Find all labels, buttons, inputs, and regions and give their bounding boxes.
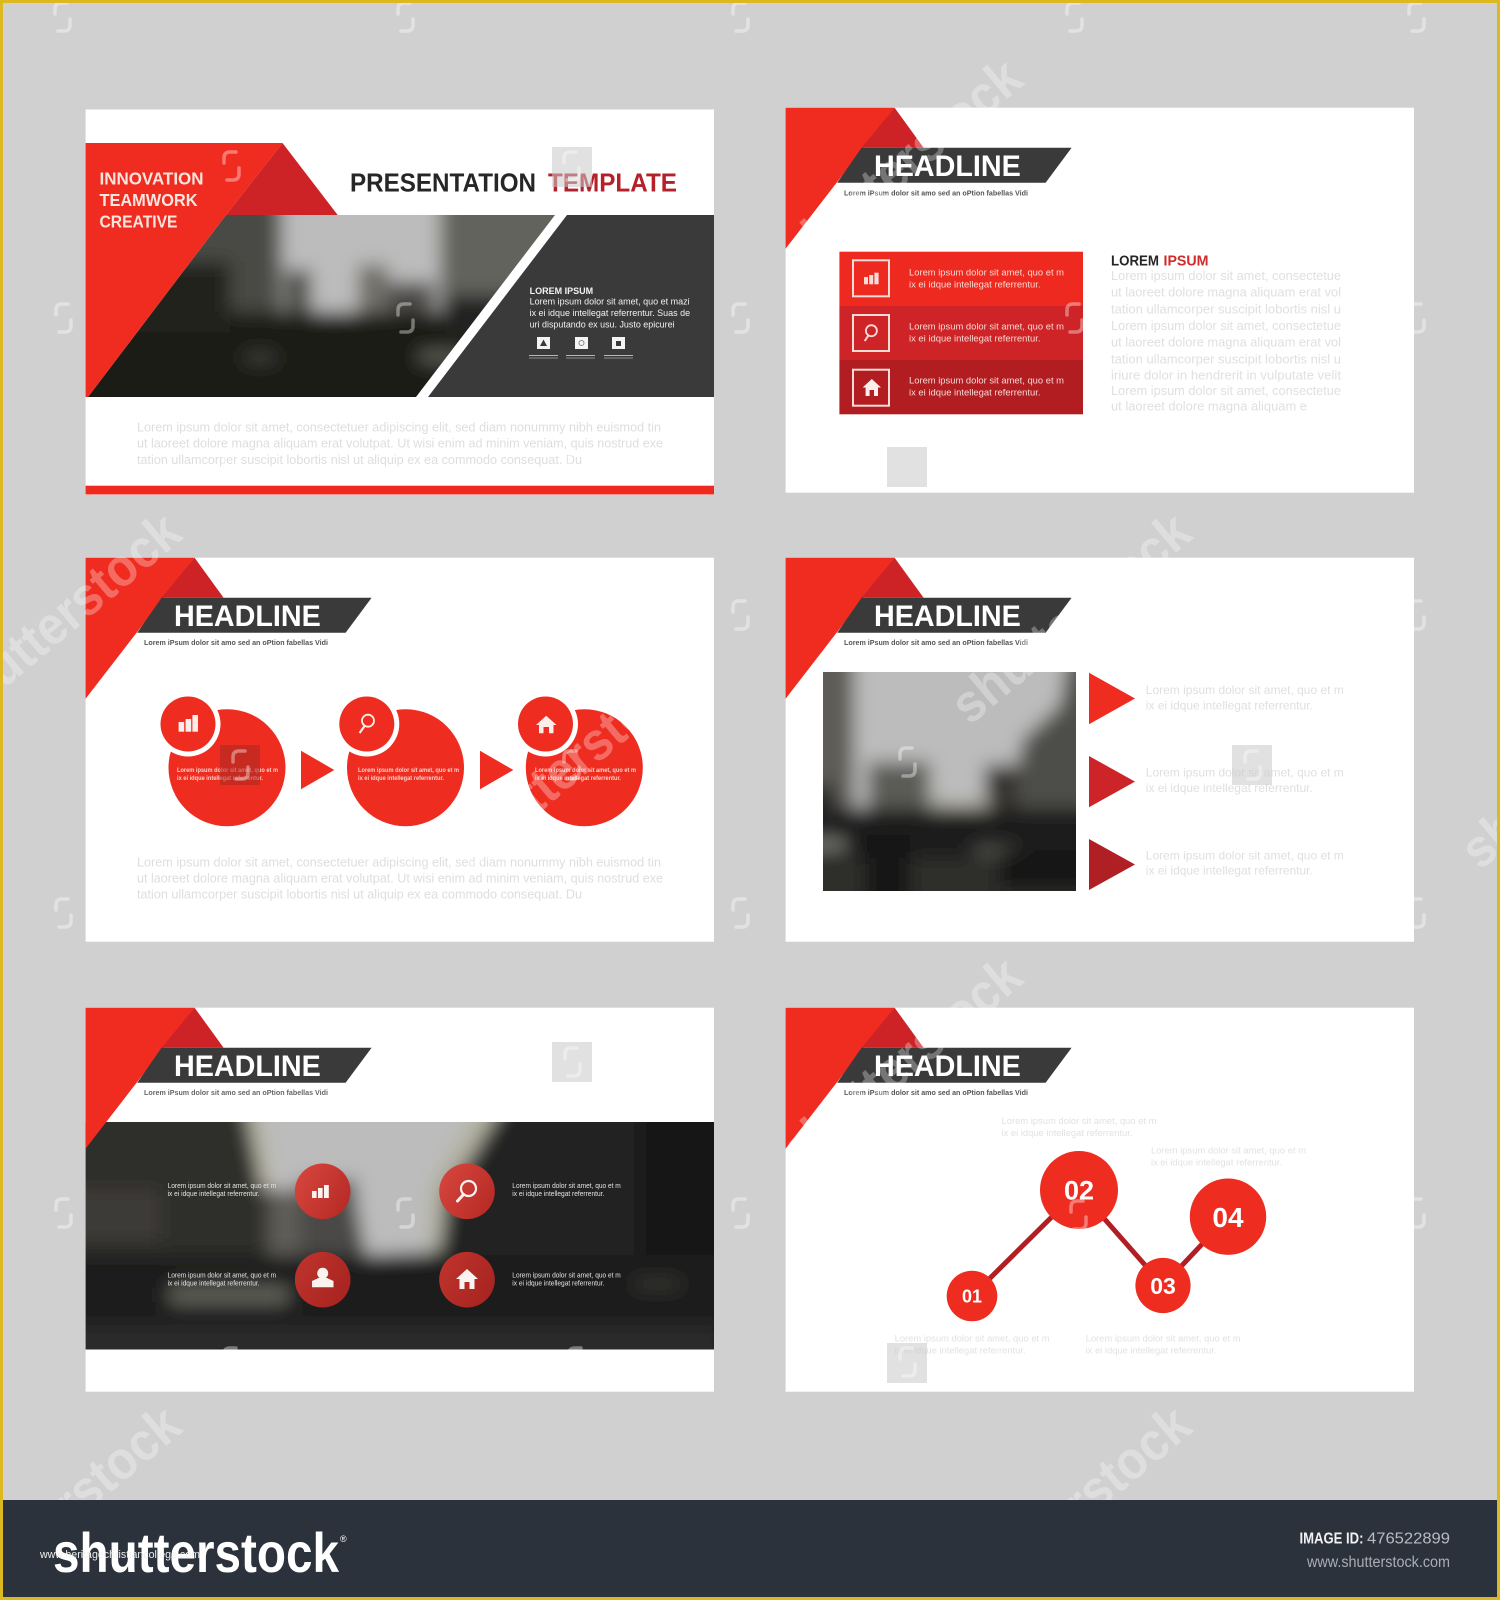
icon: bar chart — [179, 715, 198, 732]
tagline — [100, 168, 204, 231]
node captions: ix ei idque intellegat referrentur. — [1086, 1345, 1217, 1356]
header: HEADLINE — [874, 600, 1021, 633]
node captions: Lorem ipsum dolor sit amet, quo et m — [1086, 1333, 1241, 1344]
list text: ix ei idque intellegat referrentur. — [909, 334, 1040, 345]
side paragraph: ut laoreet dolore magna aliquam e — [1111, 399, 1307, 414]
header: Lorem iPsum dolor sit amo sed an oPtion fabellas Vidi — [844, 640, 1028, 647]
body text: Lorem ipsum dolor sit amet, consectetuer adipiscing elit, sed diam nonummy nibh euismod tin — [137, 855, 661, 870]
node captions — [895, 1116, 1306, 1356]
side heading: IPSUM — [1164, 254, 1208, 270]
photo captions: ix ei idque intellegat referrentur. — [512, 1278, 604, 1287]
node 03 — [1135, 1258, 1191, 1313]
step 2 circle — [334, 692, 464, 826]
icon circle: bar chart — [295, 1164, 351, 1219]
node 03: 03 — [1150, 1273, 1176, 1299]
dark panel — [428, 215, 714, 397]
tagline: CREATIVE — [100, 211, 178, 231]
registered mark: ® — [340, 1534, 347, 1544]
header: HEADLINE — [174, 600, 321, 633]
list text: Lorem ipsum dolor sit amet, quo et m — [909, 267, 1064, 278]
slide background — [86, 1008, 714, 1392]
list text: Lorem ipsum dolor sit amet, quo et m — [909, 322, 1064, 333]
node 04 — [1190, 1178, 1266, 1255]
body text — [137, 855, 663, 902]
header — [786, 108, 1072, 249]
node 02 — [1040, 1151, 1118, 1229]
tagline: TEAMWORK — [100, 190, 198, 210]
node captions: ix ei idque intellegat referrentur. — [1151, 1157, 1282, 1168]
body text: tation ullamcorper suscipit lobortis nisl ut aliquip ex ea commodo consequat. Du — [137, 887, 582, 902]
image id: 476522899 — [1367, 1530, 1450, 1547]
node captions: ix ei idque intellegat referrentur. — [895, 1345, 1026, 1356]
list text: ix ei idque intellegat referrentur. — [909, 279, 1040, 290]
triangle 3 — [1089, 839, 1135, 890]
dark panel text: uri disputando ex usu. Justo epicurei — [530, 320, 675, 330]
triangle captions: ix ei idque intellegat referrentur. — [1146, 864, 1313, 878]
watermark: diagonal wordmarks: shutterstock — [770, 944, 1034, 1179]
arrow 2 — [480, 751, 513, 789]
step 2 circle: Lorem ipsum dolor sit amet, quo et m — [358, 767, 459, 774]
dark panel text — [530, 286, 690, 330]
list text — [909, 267, 1064, 398]
body text: tation ullamcorper suscipit lobortis nisl ut aliquip ex ea commodo consequat. Du — [137, 452, 582, 467]
footer bar — [0, 1500, 1500, 1597]
side paragraph: Lorem ipsum dolor sit amet, consectetue — [1111, 383, 1341, 398]
photo captions: Lorem ipsum dolor sit amet, quo et m — [512, 1181, 621, 1190]
node 04: 04 — [1212, 1202, 1244, 1233]
connector line — [972, 1190, 1228, 1296]
step 1 circle: Lorem ipsum dolor sit amet, quo et m — [177, 767, 278, 774]
photo captions — [168, 1181, 621, 1287]
node captions: Lorem ipsum dolor sit amet, quo et m — [895, 1333, 1050, 1344]
header — [786, 558, 1072, 699]
watermark: diagonal wordmarks: shutterstock — [770, 46, 1034, 281]
step 1 circle: ix ei idque intellegat referrentur. — [177, 775, 263, 782]
triangle captions: ix ei idque intellegat referrentur. — [1146, 698, 1313, 712]
side heading: LOREM — [1111, 254, 1159, 270]
icon: bar chart — [853, 260, 889, 296]
step 2 circle: ix ei idque intellegat referrentur. — [358, 775, 444, 782]
header: HEADLINE — [874, 150, 1021, 183]
side paragraph: Lorem ipsum dolor sit amet, consectetue — [1111, 268, 1341, 283]
photo captions: Lorem ipsum dolor sit amet, quo et m — [168, 1181, 276, 1190]
triangle captions: ix ei idque intellegat referrentur. — [1146, 781, 1313, 795]
slide background — [86, 110, 714, 495]
triangle 2 — [1089, 756, 1135, 807]
watermark: gray squares — [220, 147, 1272, 1383]
header: Lorem iPsum dolor sit amo sed an oPtion fabellas Vidi — [144, 1090, 328, 1097]
slide background — [86, 558, 714, 942]
header: HEADLINE — [874, 1050, 1021, 1083]
header — [86, 1008, 372, 1149]
panel: process circles slide — [86, 558, 714, 942]
photo captions: ix ei idque intellegat referrentur. — [168, 1189, 260, 1198]
side paragraph: Lorem ipsum dolor sit amet, consectetue — [1111, 318, 1341, 333]
tagline: INNOVATION — [100, 168, 204, 188]
slide background — [786, 558, 1414, 942]
header: Lorem iPsum dolor sit amo sed an oPtion fabellas Vidi — [844, 1090, 1028, 1097]
red list box — [839, 252, 1083, 414]
list text: ix ei idque intellegat referrentur. — [909, 387, 1040, 398]
photo captions: Lorem ipsum dolor sit amet, quo et m — [168, 1270, 276, 1279]
photo captions: ix ei idque intellegat referrentur. — [168, 1278, 260, 1287]
title: TEMPLATE — [548, 170, 677, 198]
panel: photo and triangles slide — [780, 558, 1414, 942]
icon circle: magnifier — [439, 1164, 495, 1219]
overlay url: www.heritagechristiancollege.com — [39, 1549, 200, 1561]
footer logo: shutterstock — [53, 1521, 340, 1584]
blurred city photo — [88, 215, 555, 397]
node 01: 01 — [962, 1286, 982, 1306]
body text: Lorem ipsum dolor sit amet, consectetuer adipiscing elit, sed diam nonummy nibh euismod tin — [137, 420, 661, 435]
blurred city photo — [823, 672, 1076, 891]
header — [86, 558, 372, 699]
icon circle: home — [439, 1252, 495, 1307]
watermark: diagonal wordmarks: shutterstock — [439, 645, 703, 880]
photo captions: ix ei idque intellegat referrentur. — [512, 1189, 604, 1198]
red footer bar — [86, 486, 714, 494]
blurred street photo — [86, 1122, 714, 1350]
icon: home — [853, 370, 889, 406]
dark panel text: Lorem ipsum dolor sit amet, quo et mazi — [530, 296, 690, 308]
triangle captions: Lorem ipsum dolor sit amet, quo et m — [1146, 848, 1344, 862]
icon: home — [536, 716, 556, 733]
triangle 1 — [1089, 673, 1135, 724]
image id — [1300, 1530, 1450, 1547]
header: Lorem iPsum dolor sit amo sed an oPtion fabellas Vidi — [144, 640, 328, 647]
body text — [137, 420, 663, 467]
side paragraph: tation ullamcorper suscipit lobortis nisl u — [1111, 301, 1341, 316]
triangle captions: Lorem ipsum dolor sit amet, quo et m — [1146, 766, 1344, 780]
dark red triangle — [226, 143, 338, 215]
step 3 circle — [513, 692, 643, 826]
icon: magnifier — [853, 315, 889, 351]
triangle captions: Lorem ipsum dolor sit amet, quo et m — [1146, 683, 1344, 697]
watermark: diagonal wordmarks: shutterstock — [939, 500, 1203, 735]
icon: magnifier — [360, 715, 374, 733]
image id: IMAGE ID: — [1300, 1530, 1364, 1547]
panel: icon list slide — [786, 108, 1414, 493]
icon circle: person — [295, 1252, 351, 1307]
light red shape — [86, 143, 282, 397]
mini icons — [529, 337, 633, 358]
header — [786, 1008, 1072, 1149]
slide background — [786, 108, 1414, 493]
side paragraph: tation ullamcorper suscipit lobortis nisl u — [1111, 351, 1341, 366]
node captions: ix ei idque intellegat referrentur. — [1002, 1128, 1132, 1139]
dark panel text: LOREM IPSUM — [530, 286, 593, 297]
node captions: Lorem ipsum dolor sit amet, quo et m — [1002, 1116, 1157, 1127]
panel: numbered timeline slide — [786, 1008, 1414, 1392]
header: HEADLINE — [174, 1050, 321, 1083]
node 02: 02 — [1064, 1176, 1094, 1206]
title — [350, 170, 677, 198]
title: PRESENTATION — [350, 170, 536, 198]
node captions: Lorem ipsum dolor sit amet, quo et m — [1151, 1145, 1306, 1156]
slide background — [786, 1008, 1414, 1392]
dark panel text: ix ei idque intellegat referrentur. Suas de — [530, 308, 690, 319]
body text: ut laoreet dolore magna aliquam erat volutpat. Ut wisi enim ad minim veniam, quis nostrud exe — [137, 871, 663, 886]
list text: Lorem ipsum dolor sit amet, quo et m — [909, 375, 1064, 386]
side paragraph: ut laoreet dolore magna aliquam erat vol — [1111, 285, 1341, 300]
side paragraph — [1111, 268, 1341, 414]
body text: ut laoreet dolore magna aliquam erat volutpat. Ut wisi enim ad minim veniam, quis nostrud exe — [137, 436, 663, 451]
side paragraph: iriure dolor in hendrerit in vulputate velit — [1111, 367, 1341, 382]
site url: www.shutterstock.com — [1306, 1554, 1450, 1571]
photo captions: Lorem ipsum dolor sit amet, quo et m — [512, 1270, 621, 1279]
side heading — [1111, 254, 1208, 270]
arrow 1 — [301, 751, 334, 789]
header: Lorem iPsum dolor sit amo sed an oPtion fabellas Vidi — [844, 190, 1028, 197]
watermark: bracket marks — [55, 3, 1424, 1376]
panel: cover slide — [40, 110, 714, 495]
triangle captions — [1146, 683, 1344, 878]
step 1 circle — [156, 692, 286, 826]
node 01 — [947, 1271, 997, 1321]
step 3 circle: Lorem ipsum dolor sit amet, quo et m — [535, 767, 636, 774]
step 3 circle: ix ei idque intellegat referrentur. — [535, 775, 621, 782]
panel: photo with icons slide — [86, 1008, 714, 1392]
side paragraph: ut laoreet dolore magna aliquam erat vol — [1111, 335, 1341, 350]
